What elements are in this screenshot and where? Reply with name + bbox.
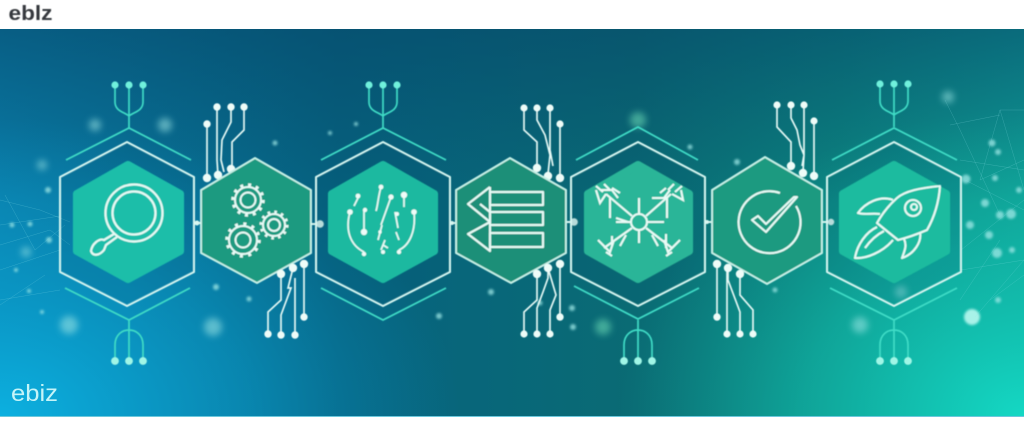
hexagon frame 3 — [316, 142, 450, 306]
chevron top 7 — [832, 128, 957, 160]
trident top 1 — [111, 81, 147, 128]
hexagon step 4: pencils — [456, 104, 566, 338]
hexagon fill 4 — [456, 158, 566, 283]
hexagon fill 5 — [588, 165, 689, 279]
chevron bottom 7 — [830, 288, 957, 320]
hexagon frame 5 — [571, 142, 705, 306]
hexagon step 1: search — [60, 81, 194, 365]
chevron bottom 3 — [321, 288, 446, 320]
trident bottom 1 — [111, 320, 147, 365]
icon: pencils — [468, 187, 543, 251]
hexagon step 3: branching lines — [316, 81, 450, 320]
hexagon frame 7 — [827, 142, 961, 306]
icon: branching lines — [347, 185, 417, 256]
hexagon step 7: rocket — [827, 80, 961, 365]
logo: bottom ebiz: ebiz — [11, 380, 58, 406]
circuit top 6 — [773, 101, 818, 180]
chevron top 3 — [321, 128, 446, 160]
trident top 7 — [876, 80, 912, 127]
icon: gears — [227, 185, 287, 256]
circuit top 2 — [203, 103, 248, 182]
all hexagon steps — [60, 80, 961, 365]
logo: top ebiz: eblz — [8, 3, 53, 25]
hexagon step 2: gears — [201, 103, 311, 339]
circuit bottom 4 — [520, 260, 564, 338]
network lines left and right — [0, 100, 1024, 317]
hexagon fill 2 — [201, 158, 311, 283]
hexagon frame 1 — [60, 142, 194, 306]
icon: magnifying glass — [91, 184, 162, 255]
circuit bottom 2 — [264, 260, 308, 339]
trident top 3 — [365, 81, 401, 128]
circuit top 4 — [520, 104, 564, 182]
trident bottom 5 — [620, 320, 656, 365]
hexagon fill 3 — [332, 165, 434, 279]
hexagon step 5: network hub — [571, 127, 705, 365]
trident bottom 7 — [876, 320, 912, 365]
icon: check mark — [739, 191, 801, 253]
hexagon step 6: check mark — [712, 101, 822, 338]
connector nodes between hexagons — [194, 218, 834, 228]
circuit bottom 6 — [713, 260, 757, 338]
icon: rocket — [855, 186, 940, 258]
chevron top 5 — [576, 127, 698, 160]
top logo bar — [0, 0, 1024, 29]
hexagon fill 6 — [712, 157, 822, 284]
icon: network hub — [596, 184, 683, 256]
hexagon fill 1 — [77, 165, 180, 279]
chevron bottom 5 — [574, 286, 699, 319]
particle glows — [10, 91, 1022, 336]
hexagon fill 7 — [843, 165, 946, 279]
chevron top 1 — [66, 128, 191, 160]
chevron bottom 1 — [65, 288, 190, 320]
